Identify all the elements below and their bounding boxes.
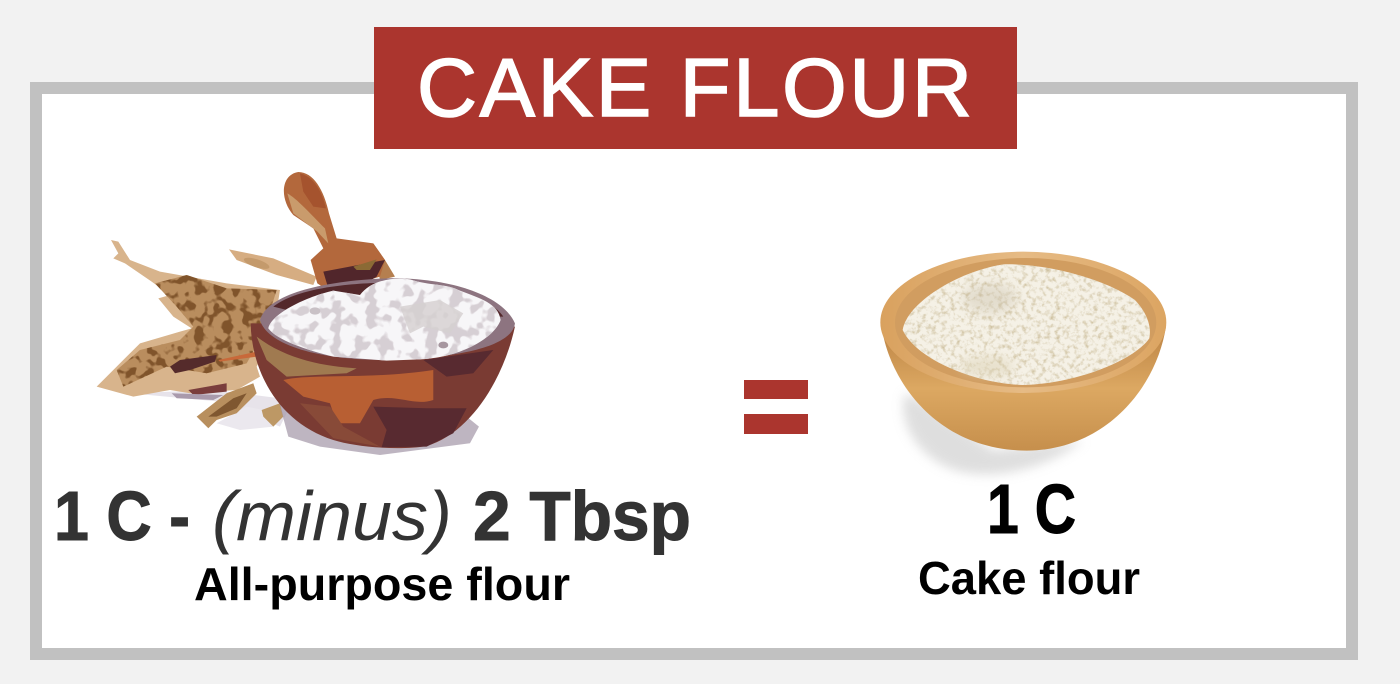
title text: CAKE FLOUR — [417, 41, 972, 134]
right label: Cake flour: Cake flour — [918, 552, 1140, 604]
bowl shadow — [903, 393, 1083, 474]
inner rim — [895, 258, 1156, 387]
photo: wooden bowl of cake flour — [880, 252, 1166, 474]
wooden bowl — [882, 327, 1166, 451]
bowl — [251, 278, 515, 448]
bowl rim — [880, 252, 1166, 393]
panel: white frame with grey border — [36, 88, 1352, 654]
bowl shadow — [277, 393, 479, 455]
left measurement: 1 C minus 2 Tbsp — [54, 477, 691, 555]
illustration: wheat and wooden bowl of all-purpose flour — [97, 172, 515, 455]
2 Tbsp: 2 Tbsp — [473, 477, 691, 555]
left label: All-purpose flour: All-purpose flour — [194, 558, 570, 610]
title banner — [374, 27, 1017, 149]
right measurement: 1 C: 1 C — [987, 470, 1076, 548]
wheat bundle — [97, 240, 317, 430]
equals sign — [744, 380, 808, 434]
flour in bowl — [268, 279, 501, 361]
1 C -: 1 C - — [54, 477, 190, 555]
scoop — [284, 172, 395, 295]
flour surface — [903, 264, 1150, 385]
(minus): (minus) — [212, 477, 452, 555]
